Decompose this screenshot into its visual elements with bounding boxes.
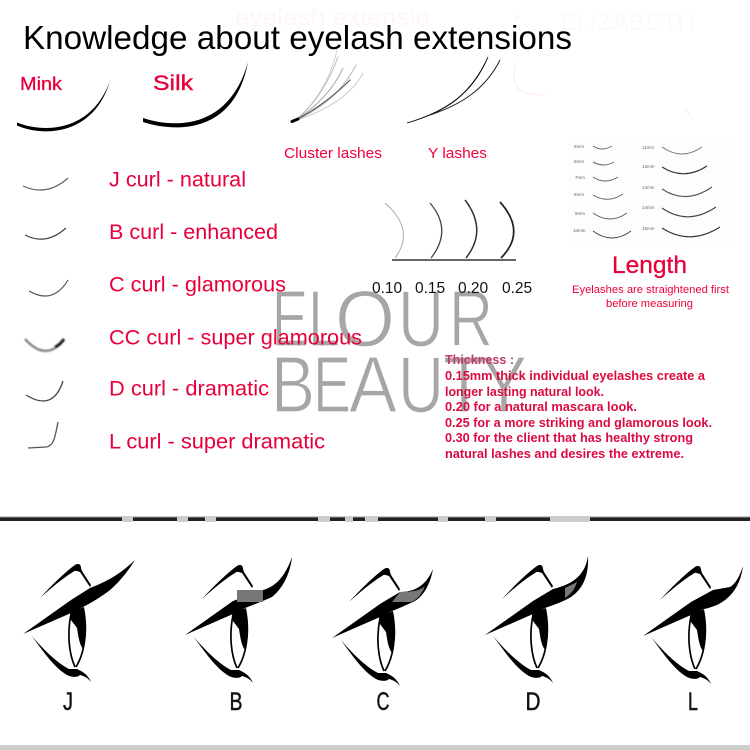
text: thickness notes: 0.25 for a more striking and glamorous look. bbox=[445, 416, 712, 430]
chart: lash length: 13mm bbox=[642, 185, 655, 190]
chart: lash length: 9mm bbox=[575, 211, 585, 216]
label: Mink: Mink bbox=[20, 74, 63, 94]
chart: lash length bbox=[568, 136, 730, 248]
chart: lash length: 15mm bbox=[642, 226, 655, 231]
text: J curl: J curl - natural bbox=[109, 168, 246, 192]
watermark: ELOUR BEAUTY: O bbox=[335, 274, 395, 363]
watermark: ELOUR BEAUTY: T bbox=[443, 340, 485, 429]
text: thickness notes: natural lashes and desires the extreme. bbox=[445, 447, 684, 461]
icon: cluster lash bbox=[292, 50, 363, 122]
text: thickness notes: 0.20 for a natural mascara look. bbox=[445, 400, 637, 414]
watermark: ELOUR BEAUTY: R bbox=[449, 274, 493, 363]
text: L curl: L curl - super dramatic bbox=[109, 430, 325, 454]
chart: lash length: 8mm bbox=[574, 192, 584, 197]
label: Cluster lashes: Cluster lashes bbox=[284, 146, 382, 162]
chart: lash thickness: 0.25 bbox=[502, 280, 532, 297]
chart: lash length: 11mm bbox=[642, 145, 654, 150]
panel: eye B bbox=[185, 557, 292, 716]
panel: eye C bbox=[332, 568, 433, 716]
panel: eye D: D bbox=[526, 688, 540, 716]
text: measuring note: before measuring bbox=[606, 298, 693, 310]
chart: lash length: 7mm bbox=[575, 175, 585, 180]
text: measuring note: Eyelashes are straightened first bbox=[572, 284, 729, 296]
watermark: ELOUR BEAUTY: B bbox=[271, 340, 315, 429]
watermark: ELOUR BEAUTY: E bbox=[272, 274, 308, 363]
text: C curl: C curl - glamorous bbox=[109, 274, 286, 296]
faint background watermarks bbox=[235, 4, 695, 118]
watermark: ELOUR BEAUTY: Y bbox=[481, 340, 527, 429]
icon: L curl bbox=[28, 422, 58, 448]
label: Silk: Silk bbox=[153, 72, 194, 95]
text: thickness notes: 0.30 for the client that has healthy strong bbox=[445, 431, 693, 445]
panel: eye L: L bbox=[688, 688, 698, 716]
panel: eye J bbox=[23, 560, 135, 716]
chart: lash length: 6mm bbox=[574, 159, 584, 164]
chart: lash length: 12mm bbox=[642, 164, 655, 169]
panel: eye J: J bbox=[63, 688, 73, 716]
heading: Length: Length bbox=[612, 252, 687, 279]
chart: lash length: 14mm bbox=[642, 205, 655, 210]
panel: eye L bbox=[643, 566, 743, 716]
icon: silk lash bbox=[143, 62, 248, 127]
panel: eye B: B bbox=[230, 688, 242, 716]
text: measuring note bbox=[572, 284, 729, 310]
panel: curl types bbox=[23, 168, 362, 454]
chart: lash thickness bbox=[372, 200, 532, 297]
faint background watermarks: eyelash extensio bbox=[235, 4, 430, 30]
chart: lash length: 5mm bbox=[574, 144, 584, 149]
panel: eye C: C bbox=[376, 688, 390, 716]
faint background watermarks: ELIZABETH bbox=[560, 9, 695, 36]
icon: J curl bbox=[23, 178, 68, 190]
text: thickness notes bbox=[445, 353, 712, 461]
icon: Y lash bbox=[407, 57, 500, 123]
watermark: ELOUR BEAUTY: U bbox=[398, 274, 444, 363]
text: D curl: D curl - dramatic bbox=[109, 378, 269, 400]
text: CC curl: CC curl - super glamorous bbox=[109, 326, 362, 350]
icon: C curl bbox=[29, 280, 68, 296]
panel: eye D bbox=[485, 556, 588, 716]
chart: lash thickness: 0.20 bbox=[458, 280, 489, 297]
watermark: ELOUR BEAUTY bbox=[271, 274, 527, 429]
icon: mink lash bbox=[17, 81, 110, 131]
icon: D curl bbox=[26, 381, 63, 401]
label: Y lashes: Y lashes bbox=[428, 146, 487, 162]
chart: lash thickness: 0.10 bbox=[372, 280, 403, 297]
chart: lash length: 10mm bbox=[573, 228, 586, 233]
text: thickness notes: 0.15mm thick individual eyelashes create a bbox=[445, 369, 706, 383]
watermark: ELOUR BEAUTY: U bbox=[398, 340, 444, 429]
watermark: ELOUR BEAUTY: L bbox=[308, 274, 340, 363]
title: Knowledge about eyelash extensions bbox=[23, 19, 572, 56]
text: B curl: B curl - enhanced bbox=[109, 221, 278, 244]
icon: CC curl bbox=[25, 339, 64, 351]
icon: B curl bbox=[25, 228, 66, 239]
watermark: ELOUR BEAUTY: E bbox=[313, 340, 351, 429]
text: thickness notes: Thickness : bbox=[445, 353, 514, 367]
panel: lash types bbox=[17, 50, 500, 162]
text: thickness notes: longer lasting natural look. bbox=[445, 385, 604, 399]
watermark: ELOUR BEAUTY: A bbox=[349, 340, 398, 429]
chart: lash thickness: 0.15 bbox=[415, 280, 445, 297]
